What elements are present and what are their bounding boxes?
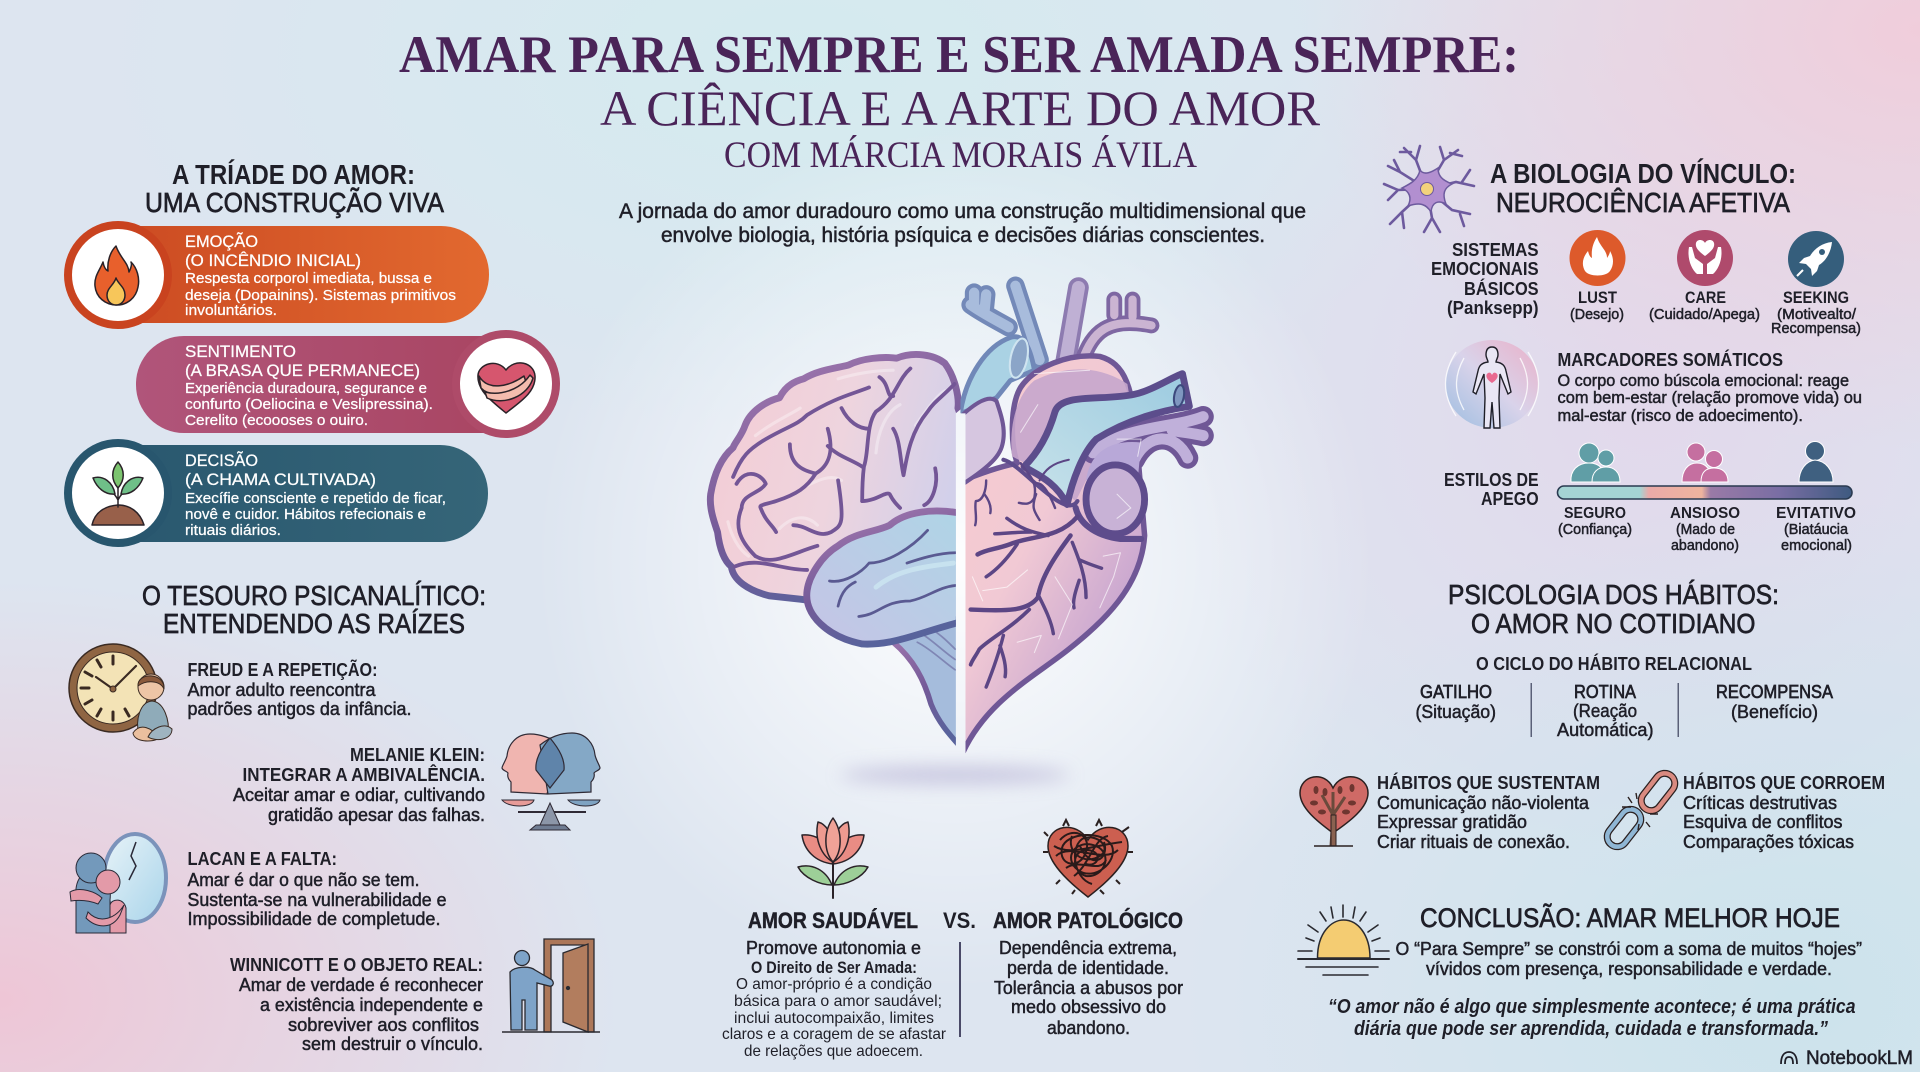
pathological love heading: AMOR PATOLÓGICO [993, 908, 1183, 933]
panel: healthy vs pathological love [722, 818, 1183, 1060]
label: attachment styles: ESTILOS DE [1444, 470, 1539, 490]
system: care: (Cuidado/Apega) [1649, 306, 1760, 323]
habit cycle steps: ROTINA [1574, 682, 1636, 702]
pill: decision: DECISÃO [185, 451, 258, 470]
label: attachment styles [1444, 470, 1539, 509]
heading: psychoanalysis [142, 580, 486, 639]
central illustration: brain and heart [710, 286, 1203, 784]
icon: tangled thorn heart [1043, 820, 1133, 897]
attachment labels: (Confiança) [1558, 522, 1632, 538]
text: somatic markers: MARCADORES SOMÁTICOS [1558, 349, 1783, 370]
heading: psychoanalysis: ENTENDENDO AS RAÍZES [163, 608, 465, 639]
title block [399, 26, 1519, 176]
text: Winnicott: WINNICOTT E O OBJETO REAL: [230, 955, 483, 975]
label: basic emotional systems: SISTEMAS [1452, 240, 1539, 260]
habit cycle steps: (Situação) [1416, 702, 1496, 722]
icon: sprout [92, 462, 144, 525]
text: habits that sustain: HÁBITOS QUE SUSTENTAM [1377, 772, 1600, 793]
text: somatic markers [1558, 349, 1862, 425]
attachment labels: (Mado de [1676, 522, 1735, 538]
shadow [840, 766, 1070, 784]
text: somatic markers: com bem-estar (relação promove vida) ou [1558, 389, 1862, 407]
pill: feeling: (A BRASA QUE PERMANECE) [185, 361, 420, 380]
text: Winnicott [230, 955, 483, 1054]
divider [959, 942, 961, 1037]
quote: “O amor não é algo que simplesmente acontece; é uma prática [1328, 996, 1856, 1018]
auricle left [955, 399, 1004, 489]
icon: heart-shaped tree [1300, 777, 1368, 846]
heading: triad: A TRÍADE DO AMOR: [172, 159, 415, 190]
quote: diária que pode ser aprendida, cuidada e transformada.” [1354, 1018, 1828, 1040]
attachment labels: EVITATIVO [1776, 505, 1856, 522]
pill: feeling: Cerelito (ecoooses o ouiro. [185, 413, 368, 429]
brain highlights [728, 370, 945, 556]
text: somatic markers: O corpo como búscola emocional: reage [1558, 372, 1849, 390]
heading: habits: PSICOLOGIA DOS HÁBITOS: [1448, 579, 1779, 610]
icon: clock and child [69, 644, 172, 741]
icon: person and door [502, 939, 600, 1032]
pathological love text: abandono. [1047, 1018, 1130, 1038]
subheading: habit cycle: O CICLO DO HÁBITO RELACIONAL [1476, 653, 1752, 674]
text: Melanie Klein: INTEGRAR A AMBIVALÊNCIA. [242, 764, 485, 785]
attachment labels: emocional) [1781, 538, 1852, 554]
pathological love text: medo obsessivo do [1011, 997, 1166, 1017]
text: Melanie Klein [233, 745, 485, 825]
panel: psychoanalytic treasure [69, 580, 600, 1054]
text: habits that corrode: Esquiva de conflitos [1683, 812, 1842, 832]
text: Winnicott: Amar de verdade é reconhecer [239, 975, 483, 995]
heart body [955, 356, 1145, 754]
icon: hugged heart [478, 363, 535, 413]
pill: decision [64, 439, 488, 547]
white veins [972, 370, 1141, 653]
text: Winnicott: sobreviver aos conflitos [288, 1015, 479, 1035]
author line: COM MÁRCIA MORAIS ÁVILA [724, 134, 1197, 176]
icon: avoidant figure [1799, 442, 1833, 482]
pill: emotion: Respesta corporol imediata, bussa e [185, 271, 432, 287]
text: Freud: FREUD E A REPETIÇÃO: [188, 659, 378, 680]
healthy love text: básica para o amor saudável; [734, 993, 942, 1010]
text: Lacan: Impossibilidade de completude. [188, 909, 440, 929]
label: basic emotional systems: EMOCIONAIS [1431, 259, 1539, 279]
text: habits that corrode: Críticas destrutivas [1683, 793, 1837, 813]
pathological love text: Tolerância a abusos por [994, 978, 1183, 998]
icon: flame [95, 246, 139, 305]
intro text: envolve biologia, história psíquica e decisões diárias conscientes. [661, 224, 1265, 247]
heading: biology [1490, 158, 1796, 218]
pill: emotion: involuntários. [185, 303, 277, 319]
text: Winnicott: sem destruir o vínculo. [302, 1034, 483, 1054]
icon: secure couple [1571, 443, 1620, 482]
pathological love text [994, 938, 1183, 1038]
text: habits that corrode: HÁBITOS QUE CORROEM [1683, 772, 1885, 793]
text: habits that sustain: Comunicação não-violenta [1377, 793, 1590, 813]
label: attachment styles: APEGO [1481, 489, 1539, 509]
heading: triad [145, 159, 444, 218]
system: care: CARE [1685, 289, 1726, 307]
main title: AMAR PARA SEMPRE E SER AMADA SEMPRE: [399, 26, 1519, 84]
text: Melanie Klein: MELANIE KLEIN: [350, 745, 485, 765]
text: somatic markers: mal-estar (risco de adoecimento). [1558, 407, 1803, 425]
heading: habits [1448, 579, 1779, 639]
healthy love text: inclui autocompaixão, limites [734, 1010, 934, 1027]
attachment labels: ANSIOSO [1670, 505, 1740, 522]
pill: feeling [136, 330, 560, 438]
icon: neuron [1384, 146, 1474, 232]
text: Melanie Klein: gratidão apesar das falhas. [268, 805, 485, 825]
brain [710, 354, 969, 752]
pill: decision: novê e cuidor. Hábitos refecionais e [185, 507, 426, 523]
conclusion text: O “Para Sempre” se constrói com a soma de muitos “hojes” [1396, 939, 1862, 959]
icon: two faces and scale [502, 733, 600, 830]
healthy love text: de relações que adoecem. [744, 1043, 923, 1060]
text: habits that corrode [1683, 772, 1885, 852]
purple vessel right [1093, 417, 1203, 460]
system: seeking [1771, 231, 1861, 337]
conclusion text [1396, 939, 1862, 979]
habit cycle steps: (Benefício) [1731, 702, 1818, 722]
pathological love text: Dependência extrema, [999, 938, 1177, 958]
system: seeking: Recompensa) [1771, 320, 1861, 337]
healthy love text [722, 938, 947, 1060]
panel: triad of love [64, 159, 560, 547]
attachment labels [1558, 505, 1856, 554]
pill: decision: Execífie consciente e repetido de ficar, [185, 491, 446, 507]
text: habits that sustain: Criar rituais de conexão. [1377, 832, 1570, 852]
system: care [1649, 230, 1760, 323]
icon: anxious couple [1682, 443, 1728, 482]
pill: emotion: deseja (Dopainins). Sistemas primitivos [185, 288, 456, 304]
icon: mirror and embrace [70, 834, 166, 933]
auricle right [1086, 465, 1145, 534]
habit cycle steps: GATILHO [1420, 682, 1492, 702]
text: Winnicott: a existência independente e [260, 995, 483, 1015]
text: Lacan: Sustenta-se na vulnerabilidade e [188, 890, 446, 910]
icon: body with radiating waves [1446, 340, 1538, 428]
intro text [619, 200, 1306, 247]
label: basic emotional systems [1431, 240, 1539, 318]
subtitle: A CIÊNCIA E A ARTE DO AMOR [600, 80, 1321, 136]
healthy love text: Promove autonomia e [746, 938, 921, 958]
habit cycle steps: (Reação [1573, 701, 1637, 721]
text: habits that corrode: Comparações tóxicas [1683, 832, 1854, 852]
attachment labels: abandono) [1671, 538, 1739, 554]
system: lust [1570, 230, 1626, 323]
text: Freud: padrões antigos da infância. [188, 699, 412, 719]
heart [955, 286, 1203, 754]
pill: decision: rituais diários. [185, 523, 281, 539]
text: Freud [188, 659, 412, 719]
system: lust: LUST [1578, 289, 1617, 307]
coronary branches [971, 460, 1102, 687]
pathological love text: perda de identidade. [1007, 958, 1169, 978]
pill: emotion [64, 221, 489, 329]
text: habits that sustain: Expressar gratidão [1377, 812, 1527, 832]
heading: triad: UMA CONSTRUÇÃO VIVA [145, 187, 444, 218]
pill: feeling: SENTIMENTO [185, 342, 296, 361]
quote [1328, 996, 1856, 1040]
text: habits that sustain [1377, 772, 1600, 852]
healthy love text: O Direito de Ser Amada: [751, 959, 917, 977]
text: Freud: Amor adulto reencontra [188, 680, 376, 700]
label: basic emotional systems: BÁSICOS [1464, 278, 1539, 299]
NotebookLM logo: NotebookLM [1806, 1048, 1913, 1069]
icon: rising sun [1298, 905, 1389, 975]
healthy love heading: AMOR SAUDÁVEL [748, 908, 918, 933]
conclusion text: vívidos com presença, responsabilidade e verdade. [1426, 959, 1832, 979]
habit cycle steps [1416, 682, 1833, 740]
healthy love text: claros e a coragem de se afastar [722, 1026, 947, 1043]
healthy love text: O amor-próprio é a condição [736, 976, 932, 993]
system: seeking: (Motivealto/ [1777, 306, 1857, 323]
panel: biology of bonding [1384, 146, 1862, 554]
intro text: A jornada do amor duradouro como uma construção multidimensional que [619, 200, 1306, 223]
heading: biology: A BIOLOGIA DO VÍNCULO: [1490, 158, 1796, 189]
great vessels [971, 286, 1151, 363]
attachment spectrum bar [1558, 486, 1852, 499]
text: Lacan: Amar é dar o que não se tem. [188, 870, 420, 890]
pill: feeling: confurto (Oeliocina e Veslipressina). [185, 397, 433, 413]
panel: conclusion [1298, 902, 1862, 1040]
panel: psychology of habits [1300, 579, 1885, 852]
pill: feeling: Experiência duradoura, segurance e [185, 381, 427, 397]
text: Lacan: LACAN E A FALTA: [188, 849, 337, 869]
attachment labels: (Biatáucia [1784, 522, 1849, 538]
label: basic emotional systems: (Panksepp) [1447, 298, 1539, 318]
system: seeking: SEEKING [1783, 289, 1849, 307]
icon: lotus flower [798, 818, 868, 898]
heading: conclusion: CONCLUSÃO: AMAR MELHOR HOJE [1420, 902, 1840, 933]
habit cycle steps: Automática) [1557, 720, 1654, 740]
heading: psychoanalysis: O TESOURO PSICANALÍTICO: [142, 580, 486, 611]
icon: broken chain [1603, 769, 1679, 851]
heading: biology: NEUROCIÊNCIA AFETIVA [1496, 187, 1790, 218]
text: Lacan [188, 849, 446, 929]
text: Melanie Klein: Aceitar amar e odiar, cultivando [233, 785, 485, 805]
pill: emotion: EMOÇÃO [185, 232, 258, 251]
blue vessel [1024, 374, 1189, 505]
habit cycle steps: RECOMPENSA [1716, 682, 1833, 702]
versus label: VS. [943, 908, 976, 933]
system: lust: (Desejo) [1570, 306, 1624, 323]
pill: emotion: (O INCÊNDIO INICIAL) [185, 251, 361, 270]
pill: decision: (A CHAMA CULTIVADA) [185, 470, 376, 489]
heading: habits: O AMOR NO COTIDIANO [1471, 608, 1756, 639]
attachment labels: SEGURO [1564, 505, 1626, 522]
